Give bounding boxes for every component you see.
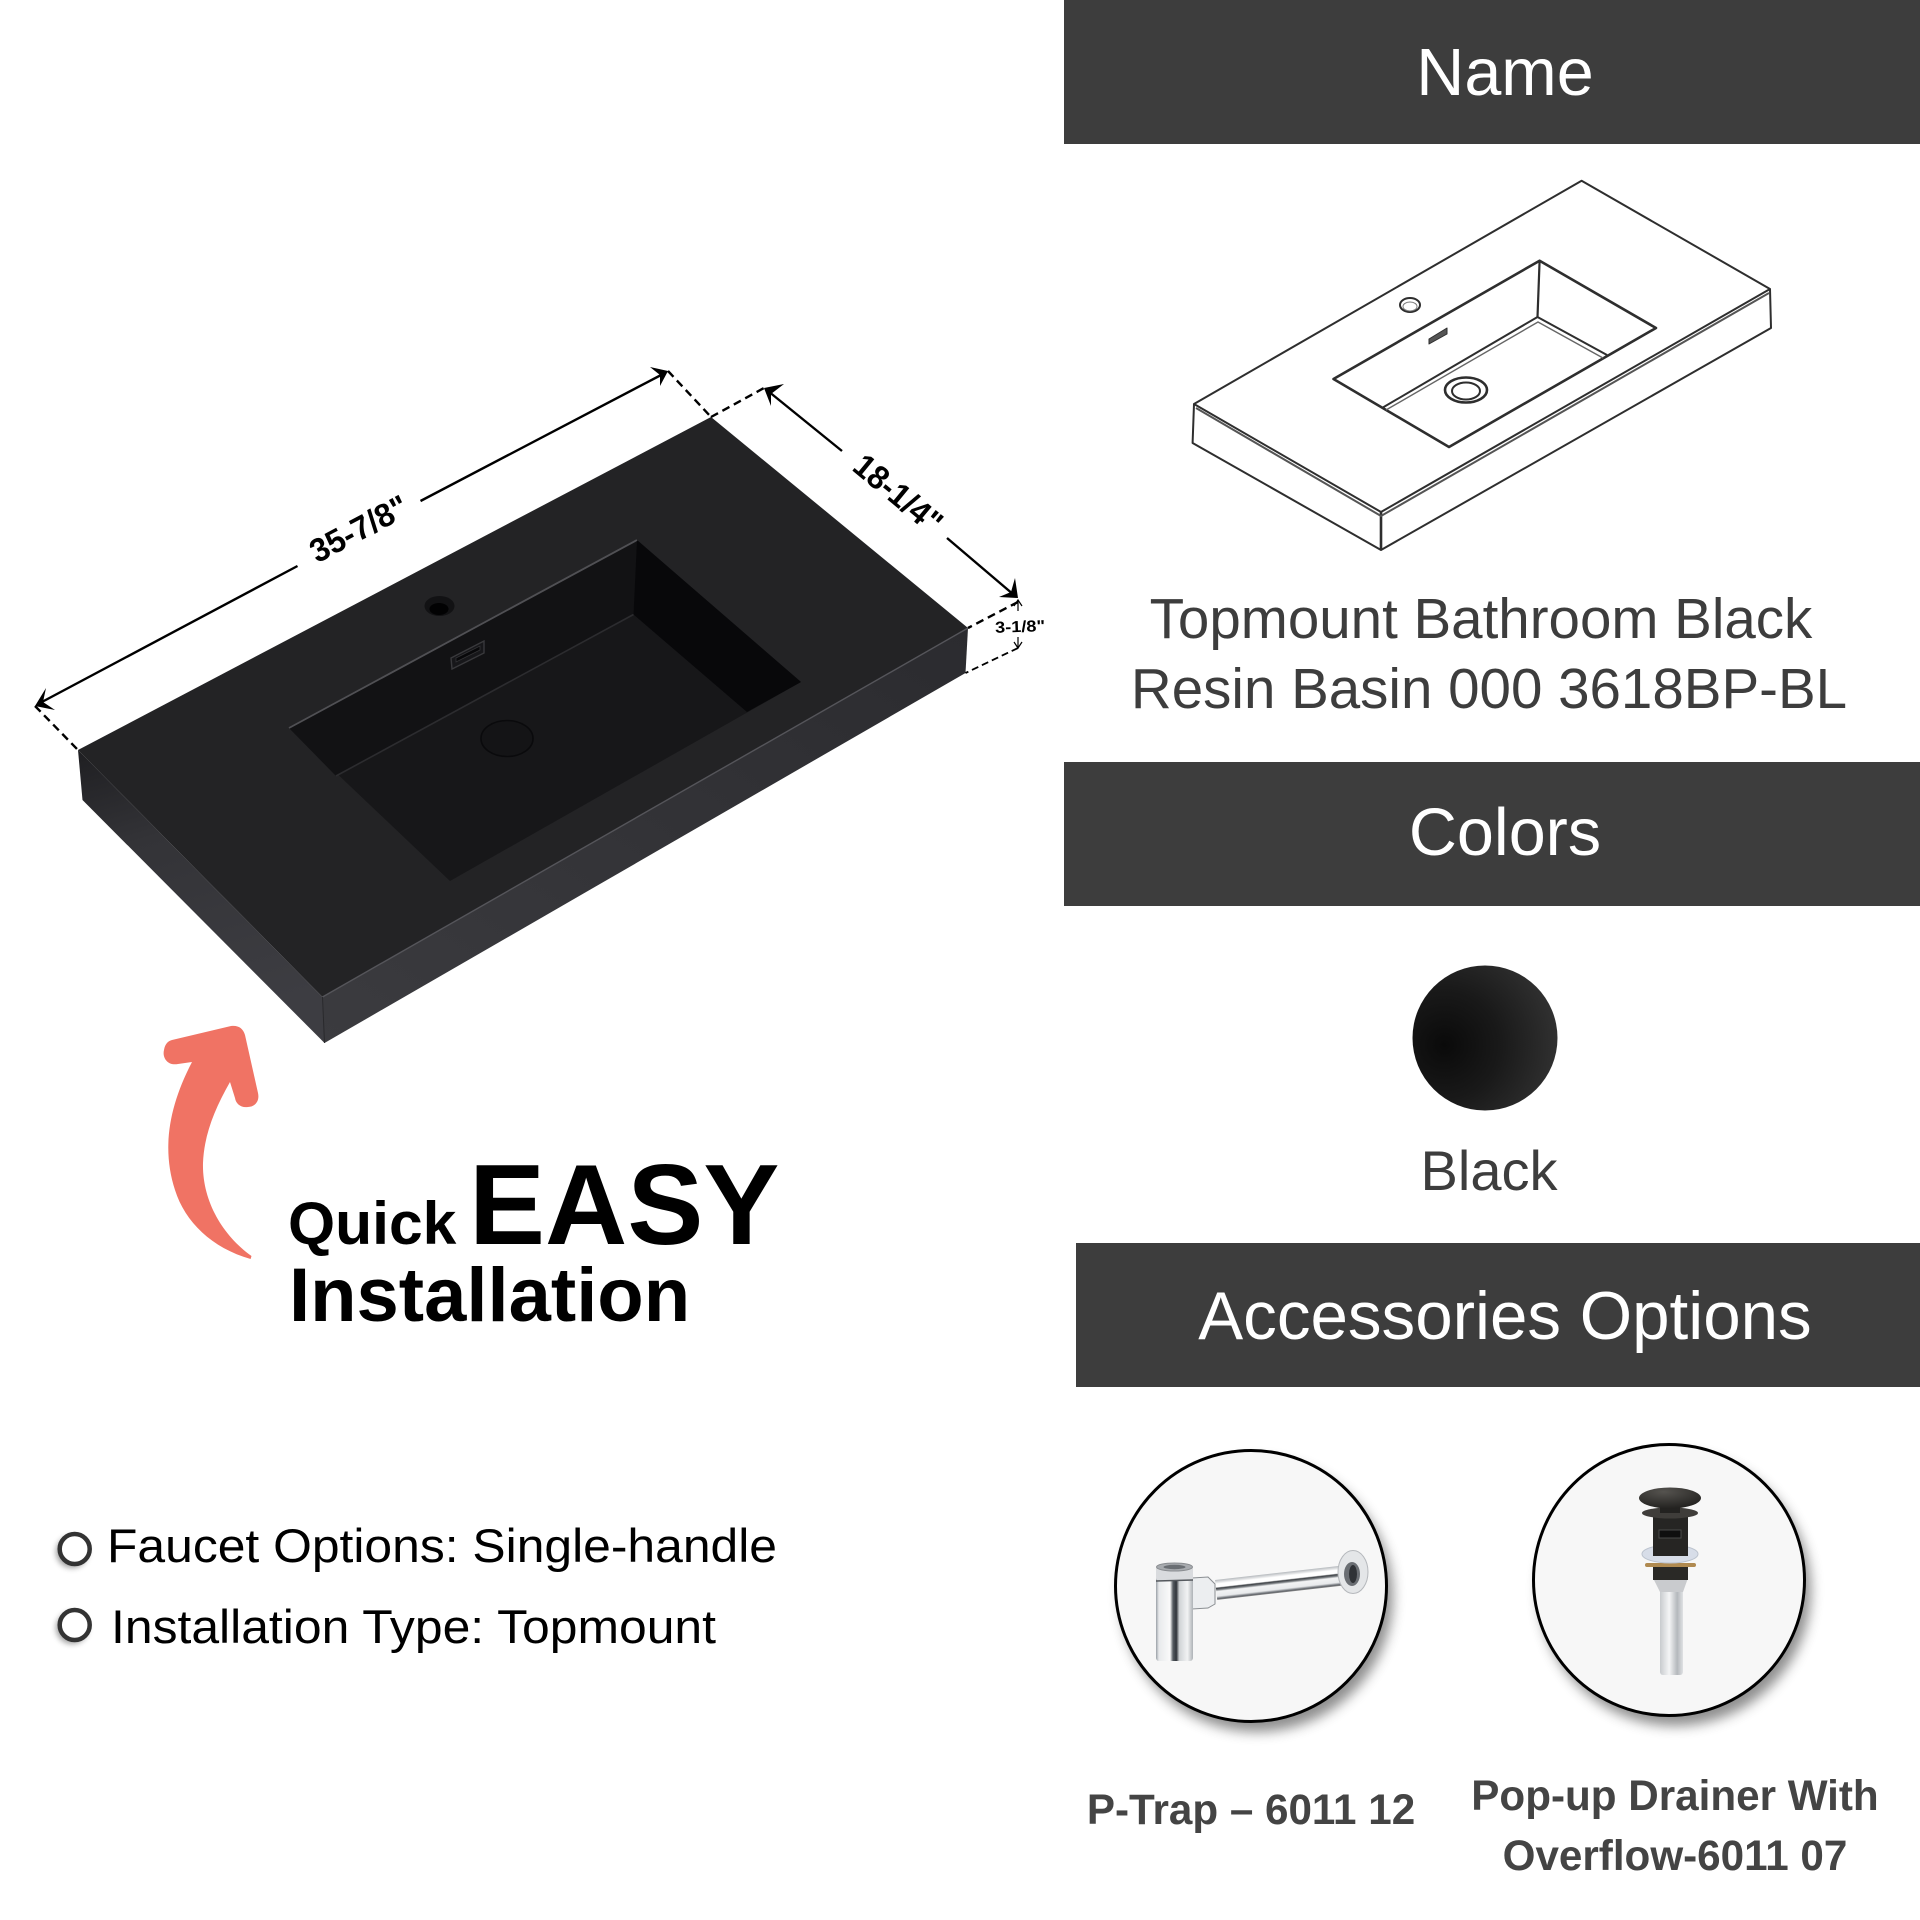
feature: installation type: Installation Type: Topmount — [111, 1600, 716, 1653]
accessory labels: Overflow-6011 07 — [1503, 1832, 1847, 1879]
basin floor — [289, 540, 801, 881]
accessory: P-trap — [1116, 1450, 1393, 1732]
product name — [1131, 587, 1847, 720]
drain stopper — [481, 720, 533, 756]
dimension: thickness 3-1/8: 3-1/8" — [995, 618, 1045, 637]
red curved arrow — [164, 1026, 258, 1259]
product name: Resin Basin 000 3618BP-BL — [1131, 657, 1847, 720]
overflow slot — [451, 641, 484, 669]
basin back wall — [289, 540, 637, 776]
line drawing: basin outline — [1193, 181, 1771, 550]
header: Colors — [1064, 762, 1920, 906]
basin side wall — [634, 540, 801, 712]
basin edges — [289, 540, 968, 1043]
accessory labels: P-Trap – 6011 12 — [1087, 1786, 1415, 1833]
header: Accessories Options — [1076, 1243, 1920, 1387]
black basin product render — [78, 417, 968, 1043]
accessory labels — [1087, 1772, 1879, 1879]
dimension: thickness 3-1/8 — [966, 600, 1045, 673]
faucet hole — [424, 596, 454, 616]
colour swatch: black — [1412, 966, 1558, 1110]
right front face — [322, 628, 968, 1043]
dimension: depth 18-1/4 — [711, 384, 1018, 628]
header: Accessories Options: Accessories Options — [1198, 1279, 1812, 1354]
accessory: pop-up drainer — [1534, 1444, 1811, 1726]
heading: Quick EASY Installation: Installation — [289, 1253, 690, 1338]
dimension: width 35-7/8: 35-7/8" — [303, 487, 414, 570]
heading: Quick EASY Installation: EASY — [469, 1142, 779, 1269]
dimension: width 35-7/8 — [35, 367, 711, 750]
accessory labels: Pop-up Drainer With — [1471, 1772, 1879, 1819]
heading: Quick EASY Installation: Quick — [288, 1189, 457, 1257]
feature: faucet options: Faucet Options: Single-handle — [107, 1519, 777, 1572]
left front face — [78, 750, 324, 1043]
dimension: depth 18-1/4: 18-1/4" — [846, 446, 950, 541]
heading: Quick EASY Installation — [288, 1142, 779, 1338]
top surface — [78, 417, 968, 997]
header: Name — [1064, 0, 1920, 144]
colour label: Black — [1421, 1139, 1558, 1202]
header: Name: Name — [1416, 36, 1594, 110]
header: Colors: Colors — [1409, 796, 1601, 870]
product name: Topmount Bathroom Black — [1150, 587, 1813, 650]
